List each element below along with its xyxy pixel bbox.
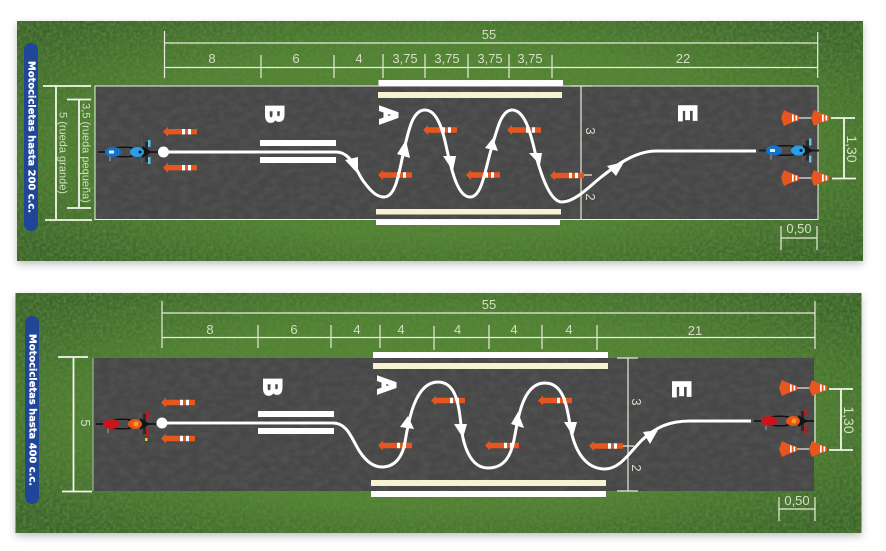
top dimensions 400 cc	[162, 297, 815, 350]
panel: motorcycles up to 200 cc	[17, 21, 863, 264]
divider dimensions 3 and 2, 200 cc	[571, 86, 598, 219]
top dimensions 400 cc: 4	[454, 322, 461, 337]
top dimensions 200 cc: 55	[482, 27, 496, 42]
top dimensions 200 cc	[164, 27, 818, 78]
zone letters 400 cc: A	[372, 376, 400, 394]
label pill 200 cc	[24, 43, 38, 231]
dimension 0,50 400 cc	[779, 493, 815, 521]
dimension 0,50 200 cc	[781, 221, 817, 250]
zone letters 400 cc	[258, 376, 695, 397]
end cones 200 cc	[781, 110, 829, 186]
end cones 400 cc	[779, 380, 827, 457]
start motorcycle 400 cc	[96, 412, 156, 441]
zone letters 200 cc: A	[374, 106, 402, 124]
left width dimensions 200 cc: 3,5 (rueda pequeña)	[80, 103, 92, 203]
top dimensions 400 cc: 4	[510, 322, 518, 337]
top dimensions 200 cc: 3,75	[392, 51, 418, 66]
divider dimensions 3 and 2, 400 cc: 2	[629, 464, 644, 472]
top dimensions 200 cc: 6	[292, 51, 300, 66]
dimension 0,50 200 cc: 0,50	[786, 221, 812, 236]
top dimensions 200 cc: 3,75	[517, 51, 543, 66]
left width dimensions 200 cc: 5 (rueda grande)	[56, 112, 68, 194]
dimension 1,30 400 cc	[829, 389, 857, 450]
top dimensions 400 cc: 55	[482, 297, 496, 312]
top dimensions 400 cc: 6	[290, 322, 298, 337]
divider dimensions 3 and 2, 400 cc	[617, 358, 644, 491]
zone letters 200 cc	[260, 105, 701, 124]
label pill 400 cc	[25, 316, 39, 504]
divider dimensions 3 and 2, 200 cc: 3	[583, 127, 598, 135]
slalom cones 200 cc	[163, 125, 584, 180]
lane bars A 400 cc	[371, 352, 608, 497]
top dimensions 400 cc: 21	[688, 323, 702, 338]
zone B bars 200 cc	[260, 140, 336, 163]
dimension 0,50 400 cc: 0,50	[784, 493, 810, 508]
top dimensions 200 cc: 22	[676, 51, 690, 66]
zone letters 200 cc: E	[673, 105, 701, 121]
lane bars A 200 cc	[376, 80, 563, 225]
end motorcycle 400 cc	[754, 409, 814, 433]
end motorcycle 200 cc	[759, 138, 819, 162]
left width dimension 400 cc	[58, 357, 93, 492]
label pill 400 cc: Motocicletas hasta 400 c.c.	[26, 334, 38, 486]
zone letters 400 cc: B	[258, 378, 286, 396]
route line 200 cc	[158, 110, 756, 202]
top dimensions 400 cc: 4	[565, 322, 573, 337]
left width dimension 400 cc: 5	[78, 419, 93, 427]
top dimensions 400 cc: 4	[397, 322, 405, 337]
top dimensions 200 cc: 8	[208, 51, 216, 66]
left width dimensions 200 cc	[43, 86, 92, 220]
zone letters 200 cc: B	[260, 105, 288, 123]
top dimensions 200 cc: 4	[355, 51, 363, 66]
track surface 400 cc	[93, 358, 815, 491]
dimension 1,30 200 cc: 1,30	[844, 135, 860, 163]
panel: motorcycles up to 400 cc	[16, 293, 862, 536]
slalom cones 400 cc	[161, 396, 623, 451]
dimension 1,30 200 cc	[831, 118, 860, 178]
top dimensions 200 cc: 3,75	[477, 51, 503, 66]
top dimensions 400 cc: 4	[353, 322, 361, 337]
top dimensions 400 cc: 8	[206, 322, 214, 337]
label pill 200 cc: Motocicletas hasta 200 c.c.	[26, 61, 36, 213]
divider dimensions 3 and 2, 400 cc: 3	[629, 398, 644, 406]
dimension 1,30 400 cc: 1,30	[841, 406, 857, 434]
divider dimensions 3 and 2, 200 cc: 2	[583, 193, 598, 201]
zone letters 400 cc: E	[667, 381, 695, 397]
top dimensions 200 cc: 3,75	[434, 51, 460, 66]
start motorcycle 200 cc	[98, 140, 158, 164]
route line 400 cc	[156, 382, 751, 469]
track surface 200 cc	[95, 86, 818, 220]
zone B bars 400 cc	[258, 411, 334, 434]
